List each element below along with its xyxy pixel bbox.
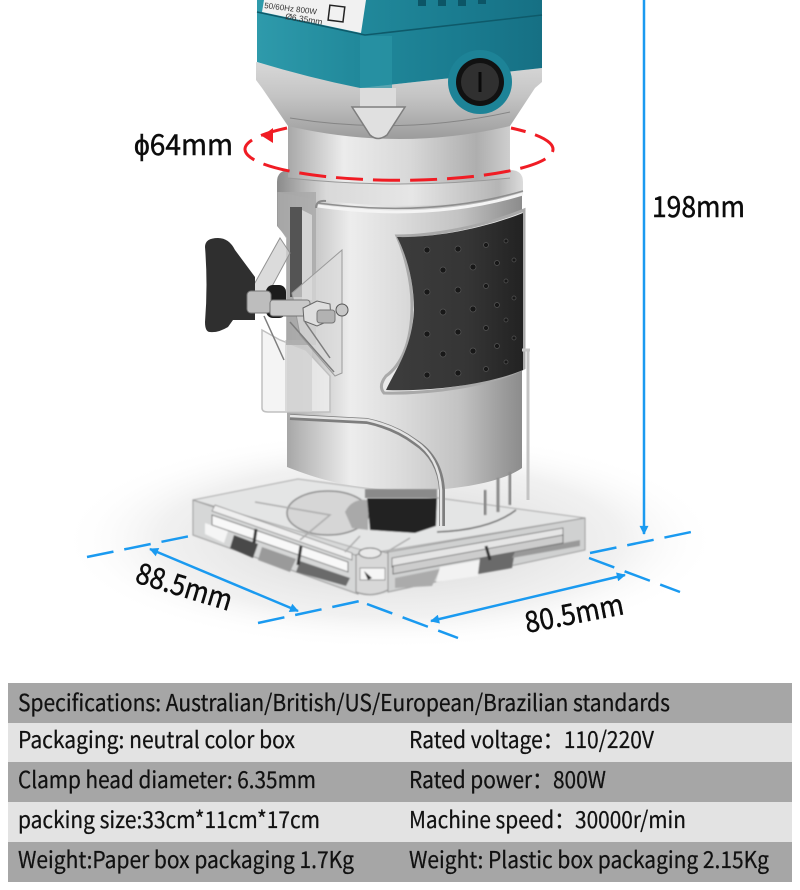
- spec label on housing: 50/60Hz 800W: [264, 1, 318, 16]
- front-left glass detail: [205, 505, 352, 586]
- depth label: 88.5mm: [131, 550, 238, 620]
- rubber grip: [381, 210, 524, 393]
- floor shadow: [60, 430, 720, 650]
- router lower body: [277, 170, 523, 498]
- wing knob and bolt: [205, 238, 348, 332]
- row: packing size: packing size:33cm*11cm*17cm: [18, 801, 320, 835]
- silver collar: [256, 62, 542, 139]
- row: rated voltage: Rated voltage：110/220V: [409, 721, 655, 755]
- row: paper box weight: Weight:Paper box packaging 1.7Kg: [18, 841, 354, 875]
- silver neck: [288, 125, 510, 184]
- red diameter ellipse arrow: [245, 128, 553, 180]
- row: machine speed: Machine speed：30000r/min: [409, 801, 686, 835]
- row: standards: Specifications: Australian/British/US/European/Brazilian standards: [18, 684, 670, 718]
- specification table: [8, 683, 792, 882]
- curved guard strip: [290, 416, 442, 526]
- front-right glass detail: [392, 528, 580, 588]
- height dimension arrow: [643, 0, 645, 534]
- dashed guide lines: [87, 531, 696, 638]
- corner post: [356, 548, 388, 595]
- row: clamp head: Clamp head diameter: 6.35mm: [18, 761, 316, 795]
- router base plate: [193, 479, 585, 596]
- spec label on housing: [262, 0, 366, 33]
- top face lines and disc: [287, 491, 369, 535]
- collet nut: [367, 498, 437, 533]
- spec label on housing: Ø6.35mm: [285, 11, 323, 27]
- upper band line: [318, 191, 523, 208]
- vent slots: [418, 0, 486, 6]
- teal motor housing: [257, 0, 542, 88]
- shoulder ring: [277, 170, 523, 206]
- width label: 80.5mm: [521, 582, 627, 642]
- diameter label: ϕ64mm: [134, 122, 233, 164]
- transparent guard: [247, 192, 530, 515]
- depth dimension arrow: [150, 549, 298, 611]
- row: rated power: Rated power：800W: [409, 761, 606, 795]
- height label: 198mm: [652, 184, 745, 226]
- row: plastic box weight: Weight: Plastic box packaging 2.15Kg: [409, 841, 769, 875]
- width dimension arrow: [431, 575, 625, 621]
- switch button: [448, 50, 512, 114]
- row: packaging: Packaging: neutral color box: [18, 721, 295, 755]
